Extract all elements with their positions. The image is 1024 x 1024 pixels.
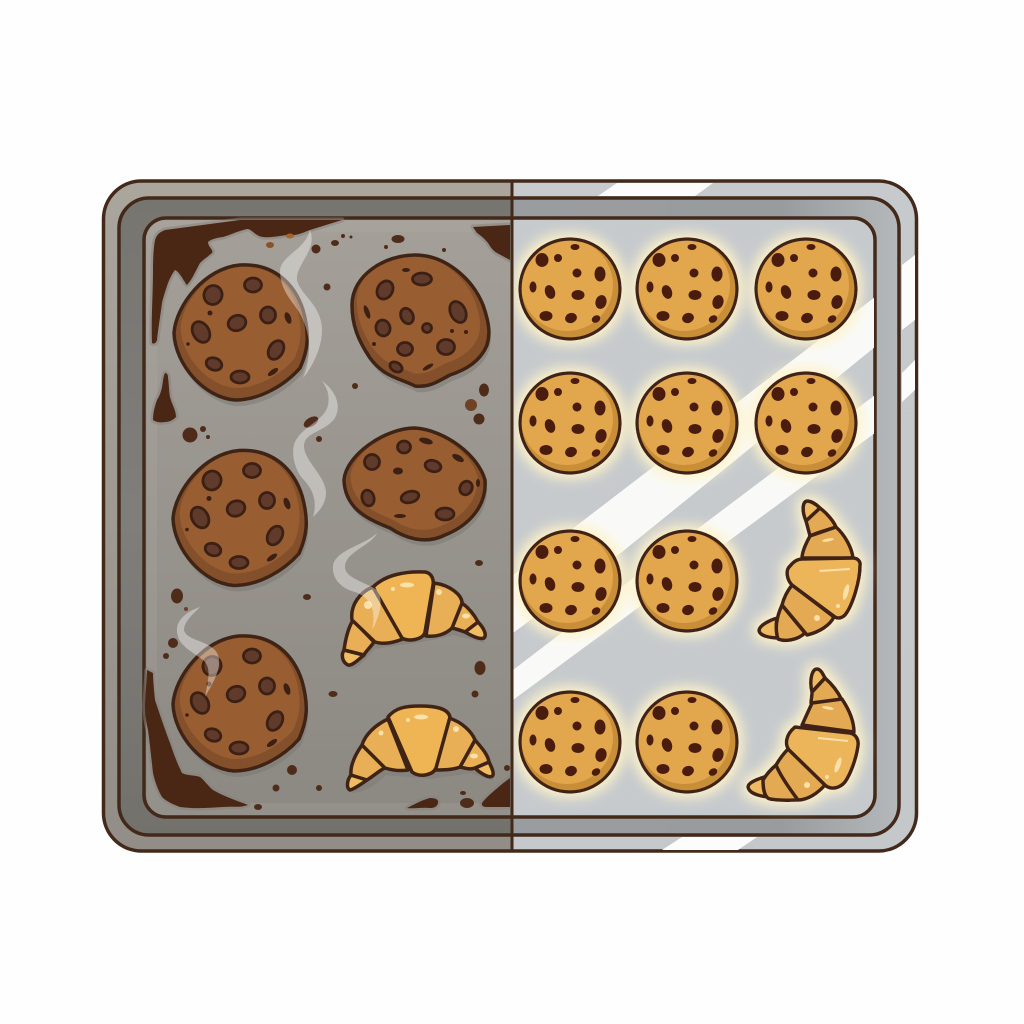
burnt stains	[145, 220, 510, 808]
burnt cookie middle left	[173, 450, 308, 592]
center divider line	[510, 180, 514, 852]
floor light streaks	[513, 297, 875, 700]
burnt cookie bottom left	[173, 636, 308, 777]
tray rim left	[102, 179, 512, 853]
tray rim right	[512, 179, 918, 853]
tray wall left	[117, 196, 510, 837]
golden cookies, row 3	[520, 531, 737, 631]
tray floor right	[514, 216, 877, 819]
burnt cookie top left	[174, 265, 309, 406]
golden croissant, lower	[748, 669, 858, 800]
croissant on burnt side, lower	[347, 706, 494, 793]
panel: clean right half of tray	[512, 179, 918, 853]
burnt cookie middle right	[344, 428, 487, 546]
grease spatters	[163, 234, 510, 810]
golden cookies, row 2	[520, 373, 856, 473]
floor edge highlight	[152, 809, 154, 812]
tray wall right	[514, 196, 901, 837]
tray floor left	[142, 216, 510, 819]
burnt cookie top right	[352, 255, 491, 392]
golden cookies, row 1	[520, 239, 856, 339]
croissant on burnt side, upper	[342, 572, 485, 669]
golden cookies, row 4	[520, 692, 737, 792]
smoke wisps	[177, 230, 381, 697]
rim light reflections	[598, 183, 915, 850]
panel: burnt left half of tray	[102, 179, 512, 853]
golden croissant, upper	[759, 501, 860, 640]
